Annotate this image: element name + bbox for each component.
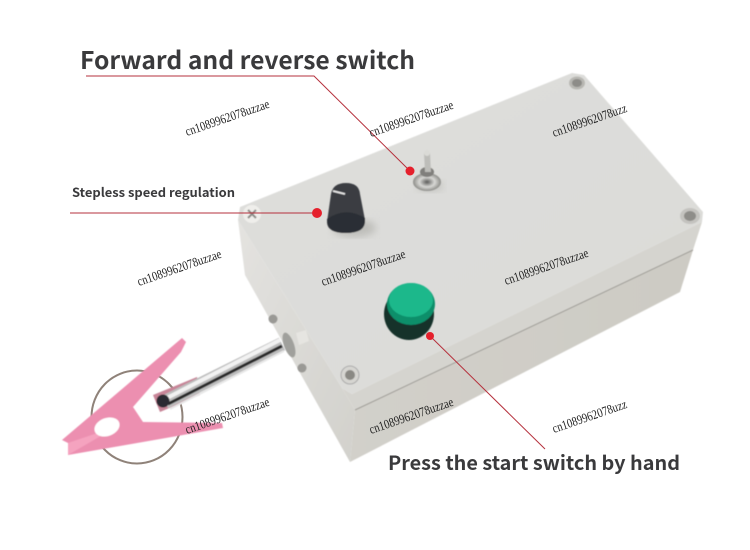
corner screw: left	[243, 205, 261, 223]
watermarks: cn1089962078uzz	[550, 100, 629, 140]
icon: toggle switch	[413, 150, 444, 192]
label: Press the start switch by hand	[388, 447, 680, 476]
corner screw: front	[341, 366, 359, 384]
box top face	[238, 73, 703, 394]
side connector and steel rod	[153, 314, 309, 412]
box front side	[350, 250, 693, 462]
box left side	[238, 220, 355, 462]
lid seam	[355, 250, 693, 410]
corner screw: top	[569, 76, 585, 90]
lid front edge	[342, 222, 702, 410]
label: Stepless speed regulation	[72, 182, 235, 201]
watermarks: cn1089962078uzzae	[502, 245, 590, 288]
icon: green start button	[384, 283, 435, 340]
callout: forward and reverse switch	[80, 42, 415, 176]
product photo: control box	[238, 73, 703, 462]
watermarks: cn1089962078uzzae	[367, 394, 455, 437]
icon: rotary speed knob	[327, 183, 376, 237]
callout: start switch	[388, 332, 680, 476]
watermarks: cn1089962078uzzae	[183, 394, 271, 437]
pink alligator clip	[62, 338, 223, 455]
watermarks: cn1089962078uzz	[550, 396, 629, 436]
watermarks: cn1089962078uzzae	[183, 96, 271, 139]
watermarks: cn1089962078uzzae	[367, 97, 455, 140]
heading: Forward and reverse switch	[80, 42, 415, 77]
key ring	[92, 370, 182, 464]
watermarks: cn1089962078uzzae	[135, 246, 223, 289]
corner screw: right	[680, 208, 700, 224]
watermarks	[135, 96, 629, 437]
watermarks: cn1089962078uzzae	[319, 246, 407, 289]
callout: stepless speed regulation	[70, 182, 322, 218]
